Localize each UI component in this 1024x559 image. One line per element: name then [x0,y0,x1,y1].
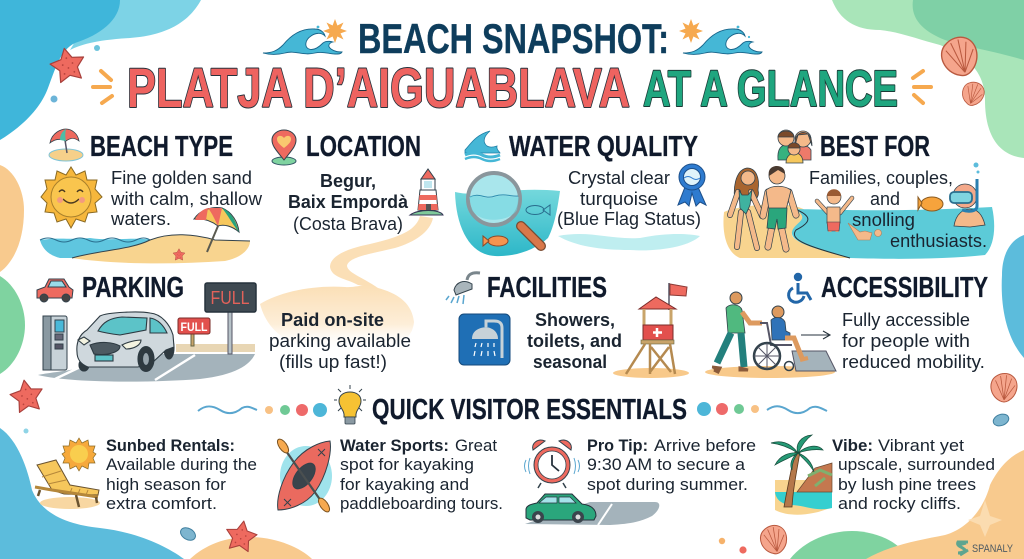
panel: water quality [455,131,706,256]
left wavy line and dots [198,403,327,417]
text: place [288,171,409,234]
text: description: Crystal clear [568,168,670,188]
text: place: Baix Empordà [288,192,409,212]
text: vibe: Vibe: [832,437,873,455]
icon: outlined fish [526,205,550,215]
illustration: sand patch [260,285,414,350]
heading: PARKING [82,272,184,304]
text: sunbed rentals: Available during the [106,456,257,474]
heading line 1: BEACH SNAPSHOT: [358,15,669,62]
illustration: silver car [77,312,174,372]
icon: family [778,130,812,163]
illustration: couple walking [730,166,796,249]
heading: WATER QUALITY [509,131,698,163]
text: water sports: Great [455,437,497,455]
text: description: and [870,189,900,209]
illustration: snorkeler [950,162,985,227]
icon: umbrella island [49,129,83,161]
panel: parking [37,272,414,382]
panel: best for [723,130,994,259]
text: description [809,168,987,251]
illustration: full sign large: FULL [210,288,250,308]
icon: light bulb [334,385,366,424]
text: description: (fills up fast!) [279,352,387,372]
illustration: helper pushing wheelchair [712,292,762,372]
icon: wave [465,131,500,161]
text: description: (Blue Flag Status) [557,209,701,229]
icon: sun [62,438,96,471]
heading: FACILITIES [487,272,607,304]
text: description: Showers, [535,310,615,330]
text: description: turquoise [580,189,658,209]
icon: wheelchair symbol [789,274,811,302]
text: vibe: and rocky cliffs. [838,495,961,513]
illustration: lifeguard tower [613,283,689,378]
illustration: child [817,189,852,232]
illustration: water foam [558,234,700,250]
illustration: sand [723,204,850,258]
text: pro tip: 9:30 AM to secure a [587,456,746,474]
text: description [527,310,622,372]
text: description: Families, couples, [809,168,953,188]
text: pro tip: Pro Tip: [587,437,648,455]
illustration: sand and ramp [705,351,836,378]
icon: blue flag ribbon [678,164,706,206]
icon: shower head [446,273,480,304]
illustration: green car at parking spot [525,494,659,525]
icon: orange fish [483,236,508,246]
text: place: (Costa Brava) [293,214,403,234]
card: vibe palm and cliffs icon [771,435,832,515]
illustration: sea [792,207,994,259]
text: description: parking available [269,331,411,351]
heading line 2 red: PLATJA D’AIGUABLAVA [127,56,630,119]
text: water sports [340,437,503,513]
text: description: snolling [852,210,915,230]
text: place: Begur, [320,171,376,191]
text: sunbed rentals [106,437,257,513]
text: vibe: Vibrant yet [878,437,964,455]
text: description: waters. [110,209,171,229]
illustration: wheelchair and rider [754,306,808,370]
text: sunbed rentals: extra comfort. [106,495,217,513]
icon: right sun star [679,19,703,43]
icon: right wave [683,26,762,54]
illustration: pavement [38,344,255,382]
icon: pay station [43,316,67,370]
illustration: beach with umbrella [40,207,250,263]
illustration: turquoise water [455,190,560,256]
text: pro tip [587,437,756,494]
title block [127,15,898,119]
text: description: Paid on-site [281,310,384,330]
icon: sun lounger [35,460,100,509]
card: water sports kayak icon [275,437,332,514]
heading: BEACH TYPE [90,131,233,163]
text: sunbed rentals: Sunbed Rentals: [106,437,235,455]
text: water sports: spot for kayaking [340,456,474,474]
illustration: shoreline [794,209,850,258]
icon: red car [37,279,73,302]
text: description: with calm, shallow [110,189,263,209]
section: quick visitor essentials heading [198,385,827,426]
icon: shower tile [459,314,510,365]
text: description [842,310,985,372]
watermark: spanaly: SPANALY [972,543,1014,555]
panel: location [272,130,443,288]
text: description: for people with [842,331,970,351]
text: description [557,168,701,229]
text: vibe: upscale, surrounded [838,456,995,474]
text: description: Fully accessible [842,310,970,330]
text: description [269,310,411,372]
icon: left wave [263,26,342,54]
illustration: full sign small: FULL [180,320,208,334]
text: water sports: paddleboarding tours. [340,495,503,513]
icon: arrow [801,331,830,339]
illustration: swimmer [848,223,882,240]
illustration: full sign large [205,283,256,354]
heading: QUICK VISITOR ESSENTIALS [372,394,687,426]
text: water sports: Water Sports: [340,437,449,455]
illustration: lighthouse [410,169,443,215]
icon: magnifying glass [468,173,541,246]
text: pro tip: Arrive before [654,437,756,455]
icon: map pin [272,130,296,165]
heading: LOCATION [306,131,421,163]
icon: fish [918,197,943,211]
text: water sports: for kayaking and [340,476,469,494]
panel: accessibility [705,272,988,378]
text: pro tip: spot during summer. [587,476,748,494]
watermark: spanaly [958,542,1014,555]
right dots and wavy line [697,402,827,416]
illustration: full sign small [178,318,210,346]
text: description: toilets, and [527,331,622,351]
heading: BEST FOR [820,131,930,163]
card: sunbed rentals [35,438,100,509]
text: sunbed rentals: high season for [106,476,227,494]
icon: smiling sun [41,167,102,228]
text: vibe [832,437,995,513]
heading line 2 green: AT A GLANCE [643,60,898,117]
text: description: seasonal [533,352,607,372]
text: description: enthusiasts. [890,231,987,251]
text: description: reduced mobility. [842,352,985,372]
text: description [110,168,263,229]
card: pro tip alarm clock icon [524,440,580,488]
panel: facilities [446,272,689,378]
icon: left sun star [323,19,347,43]
text: description: Fine golden sand [111,168,252,188]
panel: beach type [40,129,263,263]
text: vibe: by lush pine trees [838,476,976,494]
illustration: sandy path [330,216,433,288]
